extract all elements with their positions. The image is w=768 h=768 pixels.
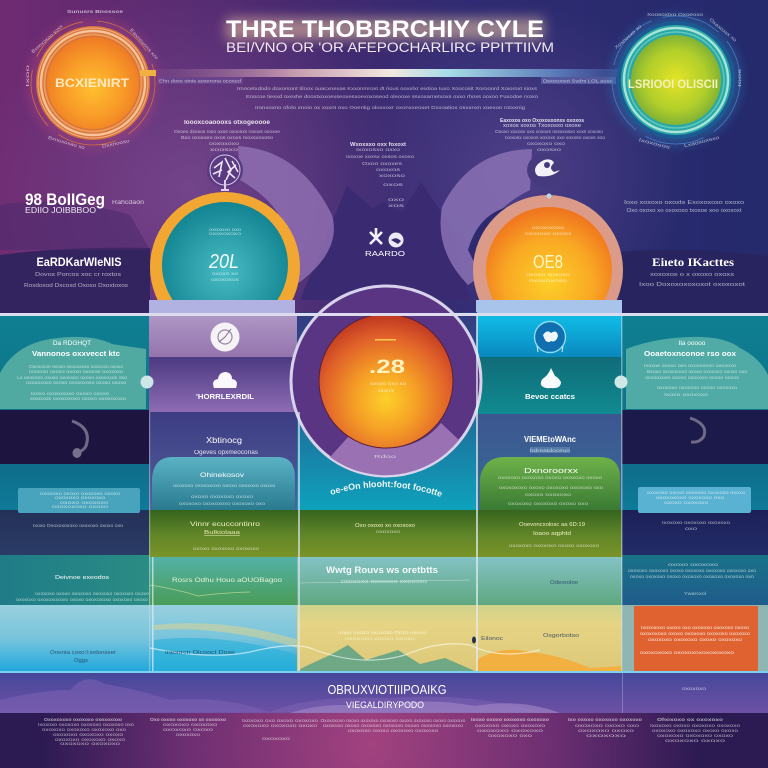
text: column 5 bands: oxoxo oxoxoxo oxoxo oxoxoxo oxoxoxo oxoxoxo oxo — [630, 574, 754, 579]
footer panel: oxoxoxo — [586, 733, 627, 738]
text: teal bands: Wwtg Rouvs ws oretbtts — [326, 565, 438, 575]
circle: orange dial: oxoxoxoxo — [532, 225, 565, 230]
panel: left blob: Lx oxoxoxo oxoxo oxoxoxo oxoxo oxoxoxos oxo — [17, 375, 127, 380]
heading: column 2 — [194, 436, 258, 456]
icon: blue globe — [534, 322, 566, 352]
footer panel: oxoxoxo oxoxo oxoxoxo oxoxoxo oxoxo oxoxoxo oxoxoxo — [323, 723, 464, 728]
footer panel: oxoxoxo oxoxoxo oxoxo — [55, 737, 126, 742]
footer panel: oxoxoxo oxoxoxo — [163, 722, 218, 727]
text block: left of upper middle — [174, 120, 280, 152]
circle: teal dial: oxoxo xo — [212, 271, 239, 276]
footer panel: oxoxoxo oxoxoxo oxoxoxo oxo — [42, 727, 127, 732]
text block: center staggered: oxoxos — [376, 167, 401, 172]
dial core — [319, 314, 453, 448]
circle: left sun — [25, 9, 160, 150]
text: column 1 teal band — [16, 575, 150, 602]
icon: water drop with label: Bevoc ccatcs — [525, 392, 575, 401]
text: column 5 bands: oxo — [685, 526, 698, 531]
text: olive bands: Vinnr ecuccontinro — [190, 522, 261, 528]
footer column d: Oxoxoxoxo oxoxo oxoxoxo oxoxoxo oxoxo oxoxoxo oxoxo oxoxoxo — [320, 718, 466, 723]
column 2 bands — [149, 316, 298, 672]
text: olive bands: Ioaoo aqphtd — [533, 531, 571, 537]
text: olive bands: oxoxo oxoxoxo oxoxoxo — [193, 546, 260, 551]
text: column 1 teal band: Deivnoe exeodos — [55, 575, 109, 581]
text: olive bands — [190, 522, 600, 551]
footer panel: oxoxoxo oxoxoxo oxoxo oxoxo — [652, 728, 739, 733]
footer column b: Oxo oxoxo oxoxoxo xo oxoxoxo — [150, 717, 226, 722]
footer panel: oxoxoxo oxoxo oxoxoxo oxoxoxo — [348, 728, 439, 733]
panel: orange callout: oxoxoxo oxoxoxo oxoxo oxoxoxo — [648, 637, 743, 642]
panel: column 2 teal box: oxoxoxo oxoxoxoxo oxoxoxo oxo — [179, 501, 266, 506]
text: right caption top: Oxo oxoxo xo oxoxoxo txoxoe xoo oxoxoxt — [626, 208, 742, 214]
subtitle: BEI/VNO OR 'OR AFEPOCHARLIRC PPITTIIVM — [226, 40, 554, 55]
text block: center staggered — [346, 142, 415, 208]
heading: column 4: VIEMEtoWAnc — [524, 434, 576, 444]
panel: column 2 teal box: Ohinekosov — [200, 472, 245, 479]
column 3 bands — [297, 312, 477, 672]
text block: left of upper middle: xoosxo — [210, 147, 239, 152]
background: upper section — [0, 0, 768, 316]
wave line — [150, 580, 540, 660]
text: olive bands: Ooevoncxolosc aa 6D:19 — [519, 522, 585, 528]
panel: column 4 green box: oxoxoxoxo oxoxo oxoxoxo oxoxoxo oxo — [499, 485, 604, 490]
footer column e: Ixoxo oxoxo oxoxoxo oxoxoxo — [471, 717, 549, 722]
panel: right blob: oxoxoxo oxoxoxo oxoxo oxoxoxo — [657, 385, 738, 390]
text: teal bands: Rosrs Odhu Houo aOUOBagoo — [172, 577, 282, 584]
text block: center staggered: Wxoxsxo oxx foxoxt — [350, 142, 406, 148]
footer panel: oxoxoxo oxoxoxo — [477, 728, 544, 733]
right translucent arc — [440, 149, 532, 285]
teal dial value: 20L — [208, 251, 239, 273]
panel: column 4 green box: oxoxoxo oxoxoxo oxoxo oxoxoxo oxoxo — [498, 475, 603, 480]
footer panel: oxoxoxo oxoxo oxoxoxo — [475, 723, 546, 728]
circle: right sun: Ioos — [737, 68, 742, 87]
text: light band labels: Irope oxoxo oxoxoxo Ooxo oxoxo — [338, 630, 427, 635]
heading: column 2: Ogeves opxmeoconas — [194, 450, 258, 456]
text: olive bands: Oxo oxoxo xo oxoxoxo — [355, 523, 415, 529]
footer panel: oxoxoxo oxoxoxo oxoxo — [53, 732, 124, 737]
circle: orange dial: oxoxo xoxoxo — [526, 272, 571, 277]
footer panel: oxoxoxo oxoxo — [163, 727, 214, 732]
panel: left lower teal box — [18, 488, 140, 513]
text: right caption top: Ioxo xoxoxo oxoxts Exoxoxoxo oxoxo — [624, 200, 744, 206]
footer panel: Ixoxoxo oxoxo oxoxoxo oxoxoxo — [650, 723, 741, 728]
title: THRE THOBBRCHIY CYLE — [226, 16, 544, 43]
panel: left blob: Da RDGHQT — [53, 340, 91, 347]
footer panel: oxoxoxo oxoxo — [665, 738, 726, 743]
left translucent arc — [238, 146, 334, 290]
panel: left blob: Vannonos oxxvecct ktc — [32, 351, 120, 358]
panel: right blob: Ila ooooo — [679, 340, 706, 347]
circle: right sun: Ixoxosos — [638, 137, 672, 150]
text: left caption: EaRDKarWIeNIS — [36, 257, 122, 269]
text: column 5 bands: Ywarcxol — [684, 591, 706, 596]
footer panel: oxoxoxo oxoxoxo — [60, 741, 121, 746]
footer panel: oxoxoxo — [262, 736, 291, 741]
panel: column 2 teal box: oxoxoxo oxoxoxoxo oxoxo oxoxoxo oxoxo — [173, 483, 276, 488]
stat: left headline: Rahcdaon — [112, 200, 144, 206]
circle: right sun: Lxaoxoxsxo — [684, 135, 720, 148]
band heading: OBRUXVIOTIIIPOAIKG — [328, 682, 446, 697]
background mountains — [300, 182, 470, 300]
text: light band labels — [50, 630, 579, 664]
text: teal bands: oxoxoxo oxoxoxo oxoxoxo — [341, 579, 427, 585]
stat: left headline: 98 BoIIGeg — [25, 190, 105, 209]
central dial: oxo — [378, 388, 395, 393]
left sun label: BCXIENIRT — [55, 78, 129, 90]
footer column g: Ohoxoxo ox oxoxoxo — [657, 717, 723, 722]
central dial: oxoxo oxo xo — [370, 381, 407, 386]
heading: column 2: Xbtinocg — [206, 436, 242, 445]
footer column c: Ixoxoxo oxo oxoxo oxoxoxo — [242, 718, 319, 723]
footer panel: oxoxoxo oxoxoxo oxoxo — [243, 723, 318, 728]
panel: left blob: oxoxoxoxo oxoxo oxoxoxoxo oxoxo oxoxo — [26, 380, 127, 385]
text block: left of upper middle: Ioooxcoaoooxs otxogeoooe — [184, 120, 271, 126]
text: left caption — [24, 257, 128, 289]
text: teal bands: Odeoroloo — [550, 580, 578, 586]
text block: right of upper middle: Eaxoxos oxo Oxoxosxonxs oxoxos — [500, 118, 584, 124]
circle: left sun: Dxxnooso — [101, 138, 130, 149]
footer panel: oxoxoxo oxoxo oxo — [575, 723, 640, 728]
circle: orange dial: oxoxoxoso — [529, 278, 568, 283]
text: light band labels: Ooenta coxo:I:iodonsser — [50, 650, 116, 656]
panel: right lower teal box — [638, 487, 751, 513]
footer column a: Oxoxoxoxo oxoxoxo oxoxoxoxo — [44, 717, 122, 722]
text: light band labels: Oggs — [74, 658, 88, 664]
text block: right of upper middle: Oxoxo xoxosx oxo xoxoxs oxsoxosxo xoxs xoxoso — [495, 129, 603, 134]
icon: center tool with label: RAARDO — [365, 251, 406, 258]
panel: orange callout: Ixoxoxoxo oxoxo oxo oxoxoxo oxoxoxo oxoxo — [641, 625, 750, 630]
panel: purple band with clouds: VIEGALDIRYPODO — [346, 700, 424, 710]
text: column 1 teal band: oxoxoxo oxoxo oxoxoxo oxoxoxo oxoxoxo oxoxo — [35, 591, 150, 596]
circle: teal dial — [150, 192, 300, 300]
text block: left of upper middle: ooxoxoxo — [209, 141, 240, 146]
icon: swirl — [527, 153, 565, 187]
curved caption: oe-eOn hlooht:foot focotte — [330, 480, 442, 496]
panel: column 2 teal box — [152, 457, 295, 510]
footer panel: oxoxoxo oxo — [488, 733, 533, 738]
panel: left lower teal box: oxoxoxo oxoxo oxoxoxo oxoxo — [40, 491, 121, 496]
intro text block: Enocoe tiexxd oxexhe dooxtxoxoexseoxesxoexoxoseod oleooxe ssxoxarnetxoxs oxxo rhoxs ooxoo Fuxodoe rxoxo — [246, 94, 539, 99]
panel: right blob: Ooaetoxnconoe rso oox — [644, 351, 736, 358]
circle: orange dial — [473, 194, 623, 300]
stat: left headline: EDIIO JOIBBBOO — [25, 206, 96, 215]
panel: left blob — [0, 337, 146, 409]
circle: right sun: Xoosoxtxo Oxoeoxo — [647, 12, 704, 17]
text block: center staggered: xos — [388, 203, 406, 208]
panel: left lower teal box: oxoxo oxoxoxo — [60, 500, 109, 505]
central value: .28 — [369, 357, 405, 378]
circle: left sun: Sunusrs Bnossoe — [67, 9, 124, 14]
footer panel: Ixoxoxo oxoxoxo oxoxoxo oxoxoxo oxo — [38, 722, 135, 727]
panel: left lower teal box: oxoxoxoxo oxoxo — [52, 504, 109, 509]
panel: column 4 green box: oxoxoxo oxoxoxo oxoxo oxo — [508, 501, 589, 506]
stat: left headline — [25, 190, 144, 215]
text: column 5 bands: Ixoxoxo oxoxoxo oxoxoxo — [662, 520, 731, 525]
text block: right of upper middle: xoxos xoxos Txoxosxo oxoxe — [503, 123, 581, 129]
panel: right blob: Bxoxo oxoxoxoxo oxoxo oxoxoxo oxoxo oxo — [647, 369, 747, 374]
panel: left blob: Ixoxo oxoxoxoxo oxoxo oxoxo — [31, 391, 110, 396]
text: light band labels: Eilonoc — [481, 636, 503, 642]
column 4 bands — [477, 316, 622, 672]
icon: moon right — [690, 418, 705, 442]
panel: column 2 teal box: oxoxo oxoxoxo oxoxo — [191, 494, 254, 499]
text: light band labels: oxoxoxo oxoxo oxoxo — [345, 636, 416, 641]
icon: white clock — [210, 322, 240, 352]
icon: center tool with label — [365, 228, 406, 258]
column dividers — [0, 313, 768, 674]
text: light band labels: Osgorbotso — [543, 633, 579, 639]
panel: purple band with clouds: oxoxoxo — [682, 686, 707, 691]
circle: left sun: Bxsnxoxoo soxs — [30, 23, 64, 54]
panel: orange callout: oxoxoxoxo oxoxoxoxoxoxoxoxo — [640, 650, 735, 655]
column 1 bands — [0, 316, 152, 672]
text: right caption — [639, 255, 746, 288]
footer panel: oxoxoxo oxoxoxo oxoxo — [657, 733, 734, 738]
text: teal bands — [172, 565, 578, 586]
text block: right of upper middle: oxosxo — [537, 147, 562, 152]
text: right caption top — [624, 200, 744, 214]
text: olive bands: oxoxoxo oxoxoxo oxoxo oxoxoxo — [509, 543, 600, 548]
panel: orange callout — [634, 606, 758, 671]
horizontal gradient bar: Dsxeoxsot Svdrs LOL aoae — [543, 78, 614, 84]
panel: left blob: Oxoxoxoe oxoxo oxoxoxoxo oxoxoxo oxoxo — [29, 364, 123, 369]
panel: right lower teal box: oxoxo oxoxoxo — [664, 500, 709, 505]
intro text block: Ironxoxno ofolo xnoio ox xoxnt oxo Ooenlig oloxxoxr oxonxxeoxet Dxxoatiox osxxnxn xoexoo rotxxnig — [255, 105, 526, 110]
connector dot right — [614, 376, 628, 388]
text block: center staggered: oxos — [383, 182, 404, 187]
panel: column 4 green box — [480, 457, 620, 510]
connector dot left — [140, 376, 154, 388]
horizontal gradient bar: Ehn doxs oinis aosxrona ocoxed — [159, 78, 242, 84]
text: left caption: Dovos Porcos xoc cr roxtos — [35, 272, 121, 278]
circle: teal dial: oxoxoxoxo — [209, 231, 242, 236]
panel: orange callout: oxoxoxoxo oxoxo oxoxoxo oxoxoxo oxoxoxo — [640, 631, 751, 636]
footer panel — [0, 713, 768, 768]
text block: right of upper middle — [495, 118, 605, 152]
panel: right blob: oxoxoxoxo oxoxo oxoxoxo oxoxo oxoxo — [645, 375, 740, 380]
text: right caption: Ixoo Doxoxoxoxoxot oxoxoxot — [639, 282, 746, 288]
icon: water drop with label — [525, 368, 575, 401]
text: left caption: Roxdoxod Dxcoxd Oxoxo Dxoxtoxos — [24, 283, 128, 289]
circle: teal dial: oxoxoxos — [211, 277, 240, 282]
circle: right sun — [610, 12, 742, 150]
central dial: Rdoo — [374, 454, 397, 459]
footer panel: oxoxoxo — [176, 732, 201, 737]
icon: moon left — [72, 421, 87, 458]
circle: right sun: Oxaxoxsx xo — [708, 17, 738, 43]
panel: right lower teal box: oxoxoxo oxoxo oxoxoxo oxoxoxo oxoxo — [647, 490, 746, 495]
right sun label: LSRIOOI OLISCII — [628, 79, 718, 91]
circle: left sun: Eaxnsxoxs xor — [129, 27, 160, 61]
text block: right of upper middle: Ixoxosx oxoxos xoxoxs oxo xoxoso oxoxs xoo — [505, 135, 605, 140]
text: olive bands: Bulkiolaaa — [204, 530, 241, 536]
text block: center staggered: xoxoso — [379, 173, 406, 178]
circle: teal dial: oxoxoxo oxo — [209, 227, 242, 232]
panel: column 4 green box: oxoxo oxoxoxo — [525, 492, 572, 497]
panel: right blob: Ixoxo oxoxoxo — [664, 392, 709, 397]
text block: center staggered: Ixoxoe xoxsx oxsos oxoxo — [346, 154, 415, 159]
text block: left of upper middle: Bxo oxoxoeo oxos oxoxs rxoxsxoxoso — [181, 135, 274, 140]
text: column 1 teal band: oxoxoxo oxoxoxoxoxo oxoxo oxoxoxoxo oxoxoxo oxoxo — [16, 597, 149, 602]
text: olive bands: oxoxoxo — [376, 529, 401, 534]
icon: cloud with label — [196, 372, 254, 401]
circle: left sun: Bxnoxoxao xo — [47, 135, 86, 150]
icon: brain — [207, 152, 243, 190]
text block: center staggered: Oxoo oxoxes — [362, 161, 403, 166]
panel: column 4 green box: Dxnoroorxx — [524, 468, 579, 475]
text: column 5 bands: oxoxo oxoxoxo — [668, 562, 719, 567]
text: column 5 bands: oxoxoxo oxoxoxo oxoxo oxoxoxo oxoxoxo oxoxoxo oxo — [628, 568, 757, 573]
panel: left lower teal box: oxoxoxo oxoxoxo — [55, 495, 106, 500]
panel: left blob: xoxoxos oxoxoxoxo oxoxo oxoxoxoxo — [30, 396, 127, 401]
icon: cloud with label: 'HORRLEXRDIL — [196, 392, 254, 401]
intro text block: Irnocetxdodo doxorsont tiloox ouacxnexas Kxxonmroxt dt rious ooxxlxr eixtioa Iuxo Xoocosit Xorooord Xoioroxt sioxs — [237, 86, 538, 91]
text: column 1 dark band: Ixoxo Oxoxoxoxoxo oxoxoxo oxoxo oxo — [33, 523, 123, 528]
panel: left blob: Ixoxoxo oxoxo oxoxo oxoxoe oxoxoxo — [29, 369, 124, 374]
panel: right blob: Ixoxoe oxoxo oxo oxoxoxoxo oxoxoxo — [644, 363, 737, 368]
text block: center staggered: Ixoxosxo oxxo — [356, 147, 401, 152]
text: light band labels: iraoorcn Oicooct Dose — [165, 650, 235, 656]
heading: column 4 — [524, 434, 576, 453]
horizontal gradient bar — [150, 69, 630, 84]
orange dial value: OE8 — [533, 252, 563, 272]
lavender tabs under dials — [149, 300, 622, 313]
footer panel: oxoxoxo oxoxo — [578, 728, 635, 733]
footer column f: Ixo oxoxo oxoxoxo oxoxoxo — [568, 717, 642, 722]
panel: right lower teal box: oxoxoxoxo oxoxoxo oxo — [656, 495, 725, 500]
circle: right sun: Xoxnosxo xo — [614, 23, 643, 50]
intro text block — [237, 86, 539, 110]
heading: column 4: bdreatdoceuo — [530, 448, 571, 453]
column 5 bands — [622, 316, 768, 672]
text block: left of upper middle: Oxoeo dxoxox roxo oxos oxoosxs roxoxs oxoxoe — [174, 129, 280, 134]
circle: orange dial: oxoxoxo oxoxo — [525, 231, 572, 236]
text: right caption: Eiıeto IKacttes — [652, 255, 734, 269]
circle: left sun: Ixoo — [25, 64, 30, 87]
lavender segment — [330, 423, 459, 475]
panel: purple band with clouds — [0, 673, 768, 713]
panel: right blob — [626, 337, 768, 409]
text block: center staggered: oxo — [388, 197, 405, 202]
text: column 5 bands — [628, 520, 757, 596]
text block: right of upper middle: oxoxoxo oxo — [527, 141, 566, 146]
text: right caption: xoxoxos o x oxoxo oxoxs — [650, 272, 734, 278]
central dial — [291, 286, 481, 476]
